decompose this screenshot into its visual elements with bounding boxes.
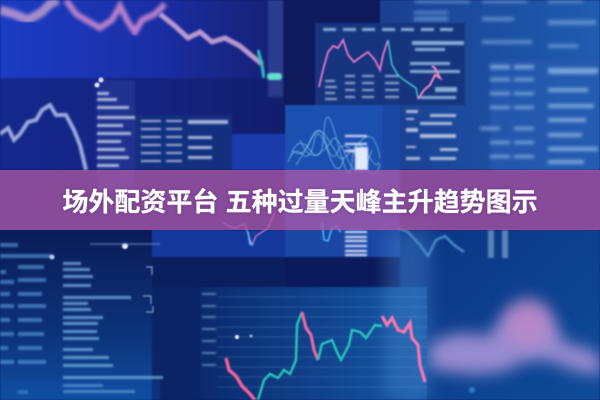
panel: right data columns xyxy=(380,0,600,170)
title band xyxy=(0,170,600,230)
panel: bottom-left data text xyxy=(0,230,285,400)
panel: bottom candlestick chart xyxy=(200,230,431,400)
panel: top-left blurred chart area xyxy=(0,0,284,170)
panel: top-centre stock table xyxy=(315,23,465,105)
title: 场外配资平台 五种过量天峰主升趋势图示 xyxy=(62,187,538,217)
panel: bottom-right blurred chart glow xyxy=(398,228,600,400)
panel: centre-left data table xyxy=(94,78,232,190)
panel: top dark navy area xyxy=(284,0,384,105)
panel: centre bright panel with wave chart xyxy=(152,105,458,257)
